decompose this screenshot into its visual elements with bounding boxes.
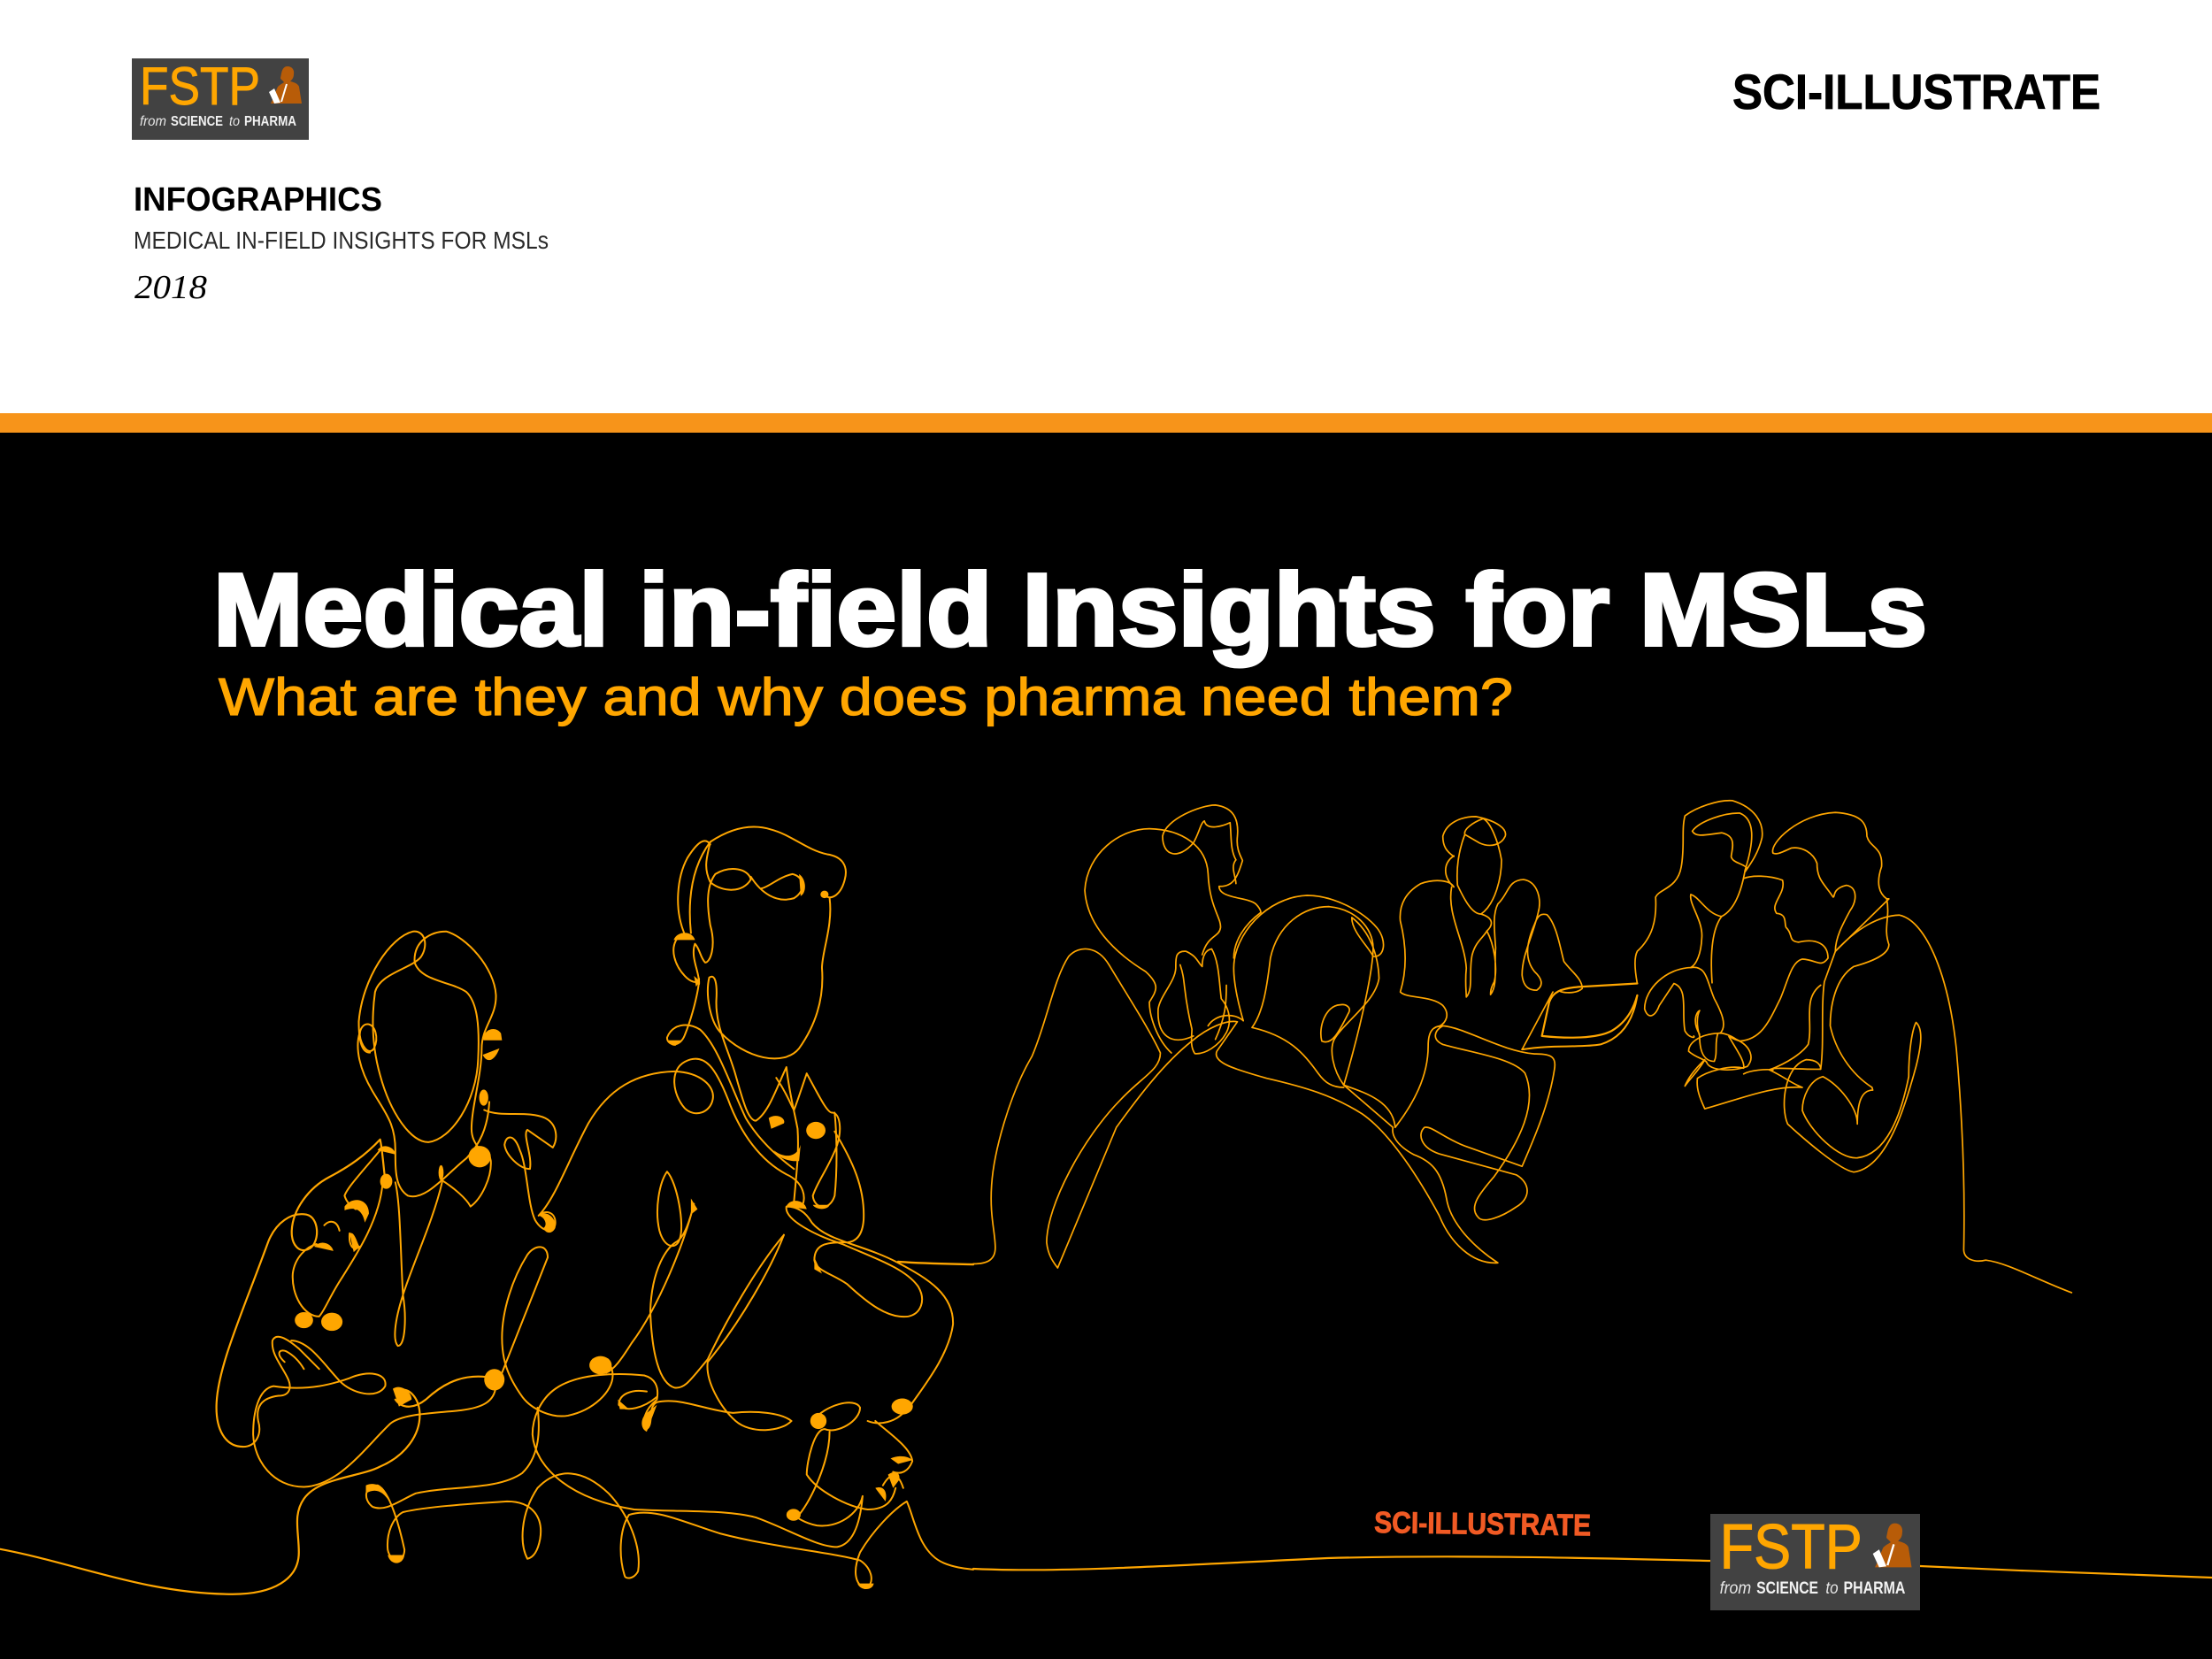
subtitle: What are they and why does pharma need them? [219, 668, 1513, 726]
logo: FSTP header: FSTP [140, 57, 260, 116]
logo: FSTP header: from [140, 114, 166, 129]
line art: group of standing people in discussion [973, 801, 2071, 1293]
logo: FSTP header [132, 57, 309, 140]
logo: FSTP footer [1710, 1513, 1920, 1610]
logo: FSTP footer: to [1825, 1579, 1839, 1598]
brand: sci-illustrate top right: SCI-ILLUSTRATE [1732, 64, 2101, 119]
logo: FSTP header: SCIENCE [171, 114, 223, 129]
line art: bottom baseline continuing to the right edge [973, 1556, 2212, 1578]
line art: two seated people, left group [0, 827, 973, 1594]
logo: FSTP footer: PHARMA [1843, 1579, 1906, 1598]
logo: FSTP footer: from [1720, 1579, 1751, 1598]
text: year: 2018 [134, 269, 207, 306]
line art: filled ink blobs of left group [295, 874, 913, 1589]
brand: sci-illustrate footer: SCI-ILLUSTRATE [1374, 1506, 1591, 1542]
title: Medical in-field Insights for MSLs [213, 552, 1927, 667]
logo: FSTP footer: FSTP [1720, 1513, 1863, 1583]
logo: FSTP header: to [229, 114, 240, 129]
orange divider band [0, 413, 2212, 433]
heading: infographics: INFOGRAPHICS [134, 181, 382, 219]
text: header subtitle: MEDICAL IN-FIELD INSIGHTS FOR MSLs [134, 227, 549, 254]
logo: FSTP header: PHARMA [244, 114, 296, 129]
logo: FSTP footer: SCIENCE [1756, 1579, 1818, 1598]
